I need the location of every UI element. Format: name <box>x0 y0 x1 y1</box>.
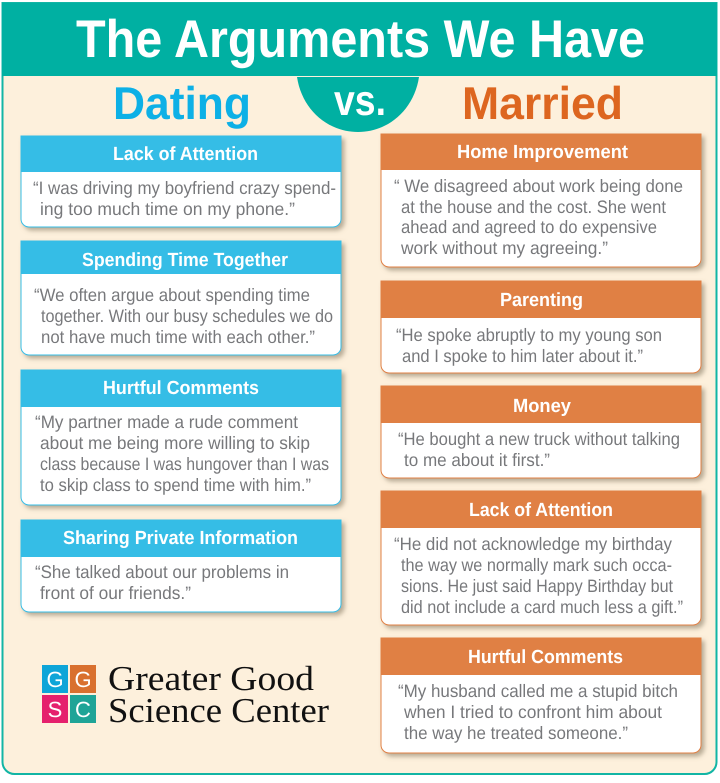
panel: married, Money: Money <box>513 396 571 417</box>
panel: married, Home Improvement: ahead and agreed to do expensive <box>401 217 657 237</box>
panel: married, Home Improvement: at the house and the cost. She went <box>401 197 666 217</box>
panel: married, Money <box>380 386 702 478</box>
title: The Arguments We Have <box>76 10 645 69</box>
panel: married, Home Improvement: Home Improvement <box>457 142 629 163</box>
heading: Dating: Dating <box>113 77 251 129</box>
panel: dating, Spending Time Together: not have much time with each other.” <box>41 327 315 347</box>
panel: dating, Hurtful Comments: Hurtful Comments <box>103 378 259 399</box>
panel: married, Home Improvement <box>380 134 702 267</box>
panel: married, Lack of Attention: did not include a card much less a gift.” <box>401 597 683 617</box>
panel: dating, Spending Time Together: together. With our busy schedules we do <box>41 306 333 326</box>
panel: married, Lack of Attention: “He did not acknowledge my birthday <box>394 534 672 554</box>
panel: married, Hurtful Comments: Hurtful Comments <box>468 647 623 668</box>
panel: married, Lack of Attention: the way we normally mark such occa- <box>401 555 672 575</box>
vs. half circle badge: vs. <box>334 77 386 125</box>
vs. half circle badge <box>297 77 419 132</box>
panel: dating, Spending Time Together: “We often argue about spending time <box>34 285 310 305</box>
panel: dating, Lack of Attention <box>20 136 342 227</box>
panel: married, Lack of Attention: Lack of Attention <box>469 500 613 521</box>
panel: dating, Lack of Attention: “I was driving my boyfriend crazy spend- <box>33 178 336 198</box>
panel: dating, Spending Time Together <box>20 241 342 355</box>
panel: dating, Lack of Attention: Lack of Attention <box>113 144 258 165</box>
panel: married, Parenting: and I spoke to him later about it.” <box>402 346 643 366</box>
header banner <box>2 3 717 76</box>
panel: married, Money: “He bought a new truck without talking <box>398 429 680 449</box>
icon: GGSC tile mark: G <box>74 667 92 692</box>
logo wordmark: Greater Good <box>108 659 315 698</box>
panel: married, Hurtful Comments <box>380 638 702 753</box>
panel: dating, Spending Time Together: Spending Time Together <box>82 250 289 271</box>
panel: dating, Hurtful Comments: “My partner made a rude comment <box>35 412 298 432</box>
panel: married, Parenting <box>380 281 702 373</box>
panel: dating, Sharing Private Information: Sharing Private Information <box>63 528 298 549</box>
panel: married, Hurtful Comments: when I tried to confront him about <box>403 702 662 722</box>
panel: dating, Sharing Private Information: “She talked about our problems in <box>35 562 289 582</box>
panel: married, Home Improvement: “ We disagreed about work being done <box>394 176 683 196</box>
panel: married, Parenting: Parenting <box>500 290 583 311</box>
logo: Greater Good Science Center <box>42 659 329 730</box>
panel: married, Lack of Attention: sions. He just said Happy Birthday but <box>401 576 673 596</box>
panel: married, Parenting: “He spoke abruptly to my young son <box>396 325 662 345</box>
panel: dating, Hurtful Comments: about me being more willing to skip <box>40 433 310 453</box>
panel: married, Hurtful Comments: the way he treated someone.” <box>404 723 628 743</box>
panel: married, Money: to me about it first.” <box>404 450 550 470</box>
panel: dating, Hurtful Comments: class because I was hungover than I was <box>40 454 329 474</box>
panel: dating, Hurtful Comments: to skip class to spend time with him.” <box>40 475 311 495</box>
icon: GGSC tile mark: G <box>46 667 64 692</box>
heading: Married: Married <box>462 77 623 129</box>
icon: GGSC tile mark: C <box>75 697 91 722</box>
panel: dating, Lack of Attention: ing too much time on my phone.” <box>40 199 295 219</box>
panel: dating, Sharing Private Information: front of our friends.” <box>40 583 191 603</box>
panel: married, Hurtful Comments: “My husband called me a stupid bitch <box>398 681 678 701</box>
icon: GGSC tile mark <box>42 665 96 723</box>
panel: dating, Sharing Private Information <box>20 520 342 612</box>
logo wordmark: Science Center <box>108 691 329 730</box>
icon: GGSC tile mark: S <box>48 697 62 722</box>
panel: married, Lack of Attention <box>380 491 702 625</box>
panel: married, Home Improvement: work without my agreeing.” <box>400 238 608 258</box>
logo wordmark <box>108 659 329 730</box>
panel: dating, Hurtful Comments <box>20 370 342 505</box>
